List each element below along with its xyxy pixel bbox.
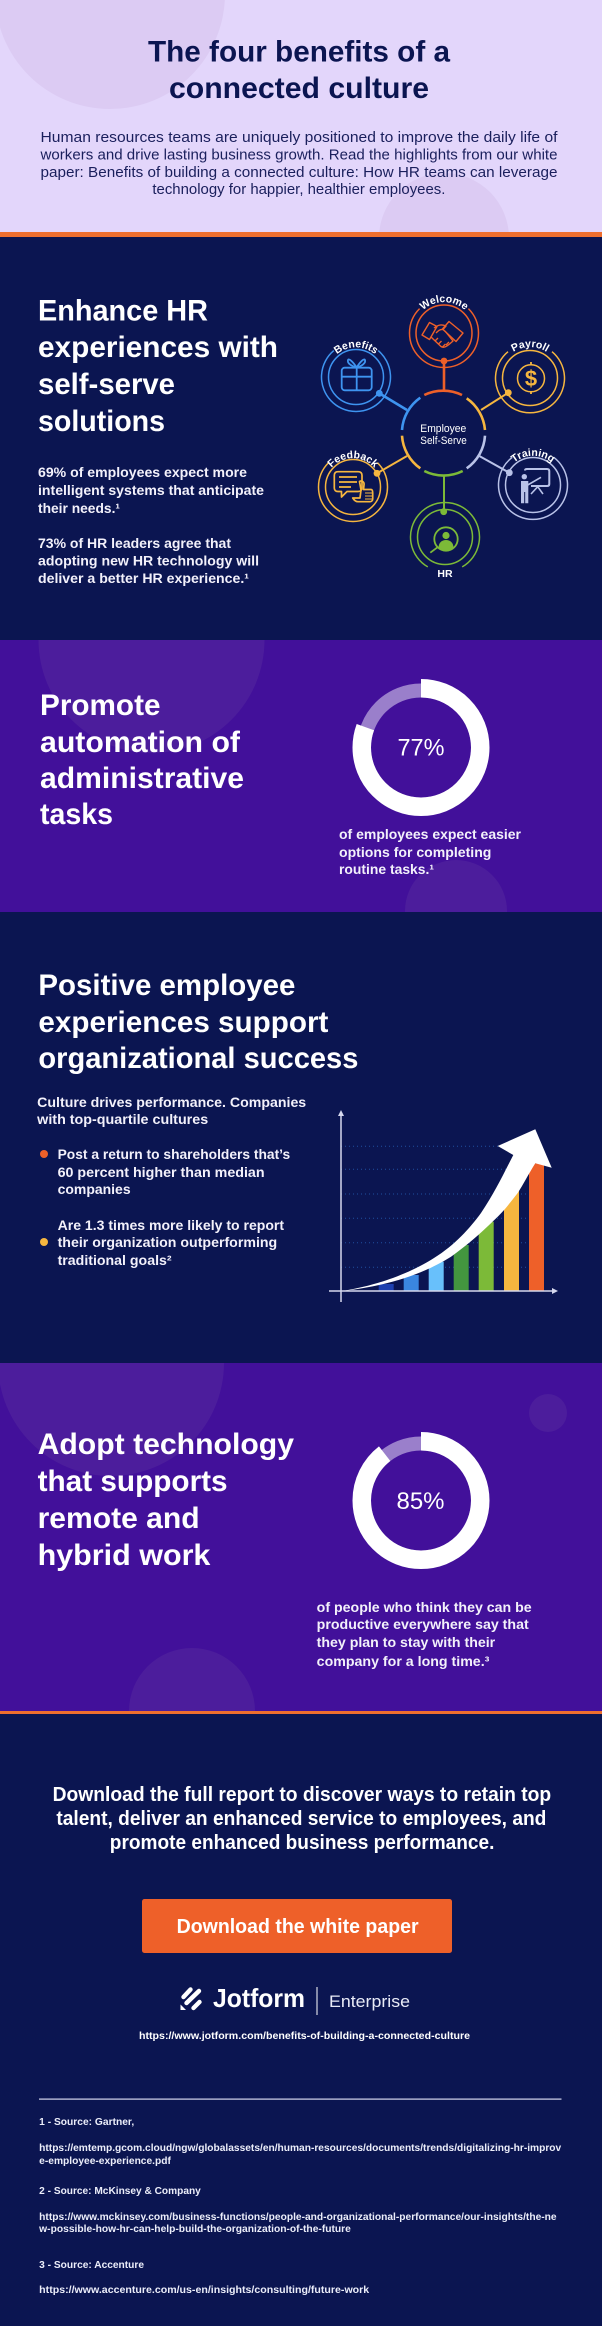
intro text: Human resources teams are uniquely positioned to improve the daily life of bbox=[40, 130, 559, 146]
title bbox=[148, 36, 450, 105]
caption: 85%: company for a long time.³ bbox=[317, 1654, 490, 1669]
panel: adopt technology bbox=[0, 1250, 602, 1774]
heading: positive experiences: organizational success bbox=[38, 1042, 358, 1075]
panel: call to action bbox=[0, 1714, 602, 2084]
bullet: outperforming goals: Are 1.3 times more likely to report bbox=[58, 1218, 285, 1233]
caption: 85%: they plan to stay with their bbox=[317, 1635, 496, 1650]
panel: sources bbox=[38, 2098, 562, 2296]
intro text bbox=[39, 130, 559, 198]
caption: 77% bbox=[339, 827, 522, 877]
icon: gift box bbox=[342, 359, 372, 390]
panel: header bbox=[0, 0, 602, 303]
node: feedback: Feedback bbox=[327, 450, 378, 468]
text: HR statistics: intelligent systems that anticipate bbox=[38, 483, 265, 498]
intro text: workers and drive lasting business growth. Read the highlights from our white bbox=[39, 148, 558, 164]
text: download invitation: talent, deliver an enhanced service to employees, and bbox=[56, 1808, 546, 1830]
donut chart: 77% bbox=[362, 688, 480, 807]
source: Gartner bbox=[39, 2117, 562, 2167]
text: download invitation: Download the full report to discover ways to retain top bbox=[53, 1784, 551, 1806]
button: download: Download the white paper bbox=[177, 1916, 419, 1938]
donut chart: 85% bbox=[362, 1441, 480, 1560]
heading: enhance HR experiences bbox=[38, 294, 278, 438]
icon: presenter at board bbox=[521, 469, 549, 503]
bullet: shareholder return: Post a return to shareholders that’s bbox=[58, 1147, 290, 1162]
heading: adopt technology bbox=[38, 1428, 294, 1572]
text: download invitation: promote enhanced business performance. bbox=[110, 1832, 494, 1854]
panel: self-serve solutions bbox=[38, 294, 568, 586]
text: culture drives performance bbox=[36, 1095, 306, 1127]
donut chart: 85%: 85% bbox=[396, 1488, 444, 1515]
text: HR statistics bbox=[38, 465, 265, 586]
bullet: outperforming goals: their organization outperforming bbox=[58, 1235, 277, 1250]
text: HR statistics: 73% of HR leaders agree that bbox=[38, 536, 232, 551]
heading: adopt technology: Adopt technology bbox=[38, 1428, 294, 1461]
source: McKinsey bbox=[38, 2186, 557, 2235]
text: culture drives performance: Culture drives performance. Companies bbox=[37, 1095, 306, 1110]
node: HR bbox=[410, 475, 480, 580]
hub ring and label bbox=[402, 391, 485, 476]
source: Gartner: 1 - Source: Gartner, bbox=[39, 2117, 134, 2128]
intro text: paper: Benefits of building a connected culture: How HR teams can leverage bbox=[40, 165, 558, 181]
bar chart: rising growth bbox=[329, 1110, 558, 1302]
caption: 85%: productive everywhere say that bbox=[317, 1617, 529, 1632]
title: The four benefits of a bbox=[148, 36, 450, 68]
source: Gartner: e-employee-experience.pdf bbox=[39, 2156, 172, 2167]
button: download bbox=[142, 1899, 452, 1953]
bullet: outperforming goals: traditional goals² bbox=[58, 1253, 172, 1268]
text: report link: https://www.jotform.com/benefits-of-building-a-connected-culture bbox=[139, 2030, 470, 2042]
heading: promote automation: administrative bbox=[40, 762, 244, 795]
source: Accenture: https://www.accenture.com/us-en/insights/consulting/future-work bbox=[39, 2285, 370, 2296]
bullet: shareholder return bbox=[40, 1147, 290, 1197]
node: payroll: Payroll bbox=[510, 341, 550, 352]
node: benefits: Benefits bbox=[333, 340, 378, 354]
hub ring and label: Self-Serve bbox=[420, 435, 467, 447]
bullet: outperforming goals bbox=[40, 1218, 285, 1268]
text: culture drives performance: with top-quartile cultures bbox=[36, 1112, 208, 1127]
source: Gartner: https://emtemp.gcom.cloud/ngw/globalassets/en/human-resources/documents/trends/digitalizing-hr-improv bbox=[39, 2143, 562, 2154]
title: connected culture bbox=[169, 72, 429, 105]
logo: Jotform Enterprise: Jotform bbox=[213, 1983, 305, 2013]
caption: 77%: routine tasks.¹ bbox=[339, 862, 435, 877]
panel: promote automation bbox=[0, 527, 602, 962]
heading: enhance HR experiences: self-serve bbox=[38, 368, 175, 401]
heading: promote automation: automation of bbox=[40, 726, 241, 759]
heading: adopt technology: that supports bbox=[38, 1465, 228, 1498]
heading: enhance HR experiences: experiences with bbox=[38, 331, 278, 364]
text: HR statistics: deliver a better HR experience.¹ bbox=[38, 571, 250, 586]
heading: positive experiences bbox=[38, 969, 358, 1075]
logo: Jotform Enterprise bbox=[180, 1983, 410, 2015]
intro text: technology for happier, healthier employees. bbox=[152, 182, 445, 198]
heading: adopt technology: remote and bbox=[38, 1502, 200, 1535]
diagram: employee self-serve hub bbox=[318, 295, 568, 580]
icon: speech bubble and thumb bbox=[334, 472, 373, 502]
icon: handshake bbox=[422, 322, 463, 347]
icon: dollar coin: $ bbox=[525, 366, 537, 391]
node: welcome bbox=[408, 295, 480, 390]
node: welcome: Welcome bbox=[418, 295, 468, 310]
logo: Jotform Enterprise: Enterprise bbox=[329, 1992, 410, 2011]
icon: magnifier with person bbox=[430, 527, 458, 553]
source: Accenture: 3 - Source: Accenture bbox=[39, 2260, 144, 2271]
heading: promote automation: Promote bbox=[40, 689, 160, 722]
hub ring and label: Employee bbox=[420, 423, 466, 435]
bullet: shareholder return: 60 percent higher than median bbox=[58, 1165, 265, 1180]
text: download invitation bbox=[53, 1784, 551, 1854]
heading: promote automation bbox=[40, 689, 244, 831]
bullet: shareholder return: companies bbox=[58, 1182, 131, 1197]
arrow: growth trend bbox=[343, 1129, 552, 1291]
node: training bbox=[479, 448, 568, 520]
caption: 85% bbox=[317, 1600, 532, 1669]
node: payroll bbox=[480, 341, 566, 414]
source: McKinsey: 2 - Source: McKinsey & Company bbox=[39, 2186, 201, 2197]
heading: positive experiences: Positive employee bbox=[38, 969, 295, 1002]
heading: positive experiences: experiences support bbox=[38, 1006, 328, 1039]
node: HR: HR bbox=[437, 568, 453, 580]
text: HR statistics: 69% of employees expect more bbox=[38, 465, 248, 480]
heading: enhance HR experiences: Enhance HR bbox=[38, 294, 208, 328]
panel: positive employee experiences bbox=[0, 912, 602, 1363]
donut chart: 77%: 77% bbox=[398, 734, 444, 762]
heading: promote automation: tasks bbox=[40, 798, 113, 831]
source: McKinsey: w-possible-how-hr-can-help-build-the-organization-of-the-future bbox=[38, 2224, 351, 2235]
node: benefits bbox=[320, 340, 408, 412]
heading: adopt technology: hybrid work bbox=[38, 1539, 211, 1572]
caption: 85%: of people who think they can be bbox=[317, 1600, 532, 1615]
heading: enhance HR experiences: solutions bbox=[38, 405, 165, 438]
node: training: Training bbox=[510, 448, 554, 464]
text: HR statistics: adopting new HR technology will bbox=[38, 554, 259, 568]
text: HR statistics: their needs.¹ bbox=[38, 501, 121, 516]
source: Accenture bbox=[39, 2260, 370, 2296]
caption: 77%: of employees expect easier bbox=[339, 827, 522, 842]
node: feedback bbox=[318, 450, 408, 522]
source: McKinsey: https://www.mckinsey.com/business-functions/people-and-organizational-performance/our-insights/the-ne bbox=[39, 2212, 557, 2223]
caption: 77%: options for completing bbox=[339, 845, 491, 860]
